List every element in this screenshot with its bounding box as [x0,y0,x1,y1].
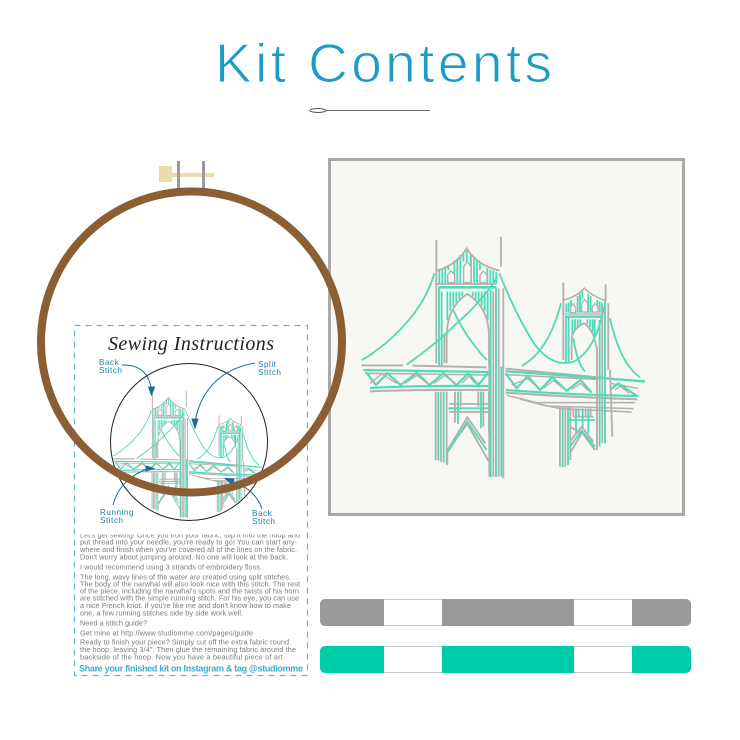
instructions text: where and finish when you've covered all of the lines on the fabric. [79,545,297,554]
instructions text: are stitched with the simple running stitch. For his eye, you can use [80,594,299,603]
instructions text: backside of the hoop. Now you have a beautiful piece of art. [80,652,285,661]
arrow: split stitch [192,363,255,428]
label: back stitch bottom: Stitch [252,517,275,526]
instructions text: one, a few running stitches side by side work well. [80,608,243,617]
instructions text: The long, wavy lines of the water are created using split stitches. [80,572,291,581]
title: Kit Contents [215,32,552,94]
card heading: Sewing Instructions [108,333,274,355]
stitch diagram [110,364,268,520]
needle divider [310,108,430,112]
instructions text: of the piece, including the narwhal's spots and the twists of his horn [80,586,299,596]
bridge embroidery pattern [362,237,645,478]
instructions text: a nice French knot. If you're like me and don't know how to make [80,601,291,610]
panel: sewing instructions card [74,326,308,676]
instructions text: Ready to finish your piece? Simply cut off the extra fabric round [80,638,289,646]
label: split stitch: Stitch [258,368,281,377]
instructions text: I would recommend using 3 strands of embroidery floss. [80,562,262,571]
floss bar: teal [320,646,691,673]
instructions text: Get mine at http://www.studiomme.com/pages/guide [80,628,253,637]
label: back stitch bottom: Back [252,509,273,518]
instructions text: put thread into your needle, you're ready to go! You can start any- [80,538,298,547]
label: running stitch: Running [100,508,134,517]
instructions text [79,530,300,661]
arrow: running stitch [113,466,154,505]
label: running stitch: Stitch [100,516,123,525]
arrow: back stitch [122,365,154,395]
label: back stitch top: Back [99,358,120,367]
instructions text: Let's get sewing! Once you iron your fabric, slip it into the hoop and [80,530,300,540]
label: split stitch: Split [258,360,277,369]
arrow: back stitch lower [225,478,262,509]
icon: embroidery hoop [41,161,342,492]
instructions text: The body of the narwhal will also look nice with this stitch. The rest [80,579,300,588]
label: back stitch top: Stitch [99,366,122,375]
share call to action: Share your finished kit on Instagram & tag @studiomme [79,664,303,674]
instructions text: Don't worry about jumping around. No one will look at the back. [80,552,288,561]
panel: fabric with bridge pattern [330,160,684,514]
floss bar: gray [320,599,691,626]
instructions text: the hoop, leaving 3/4". Then glue the remaining fabric around the [80,645,296,654]
instructions text: Need a stitch guide? [80,618,147,627]
